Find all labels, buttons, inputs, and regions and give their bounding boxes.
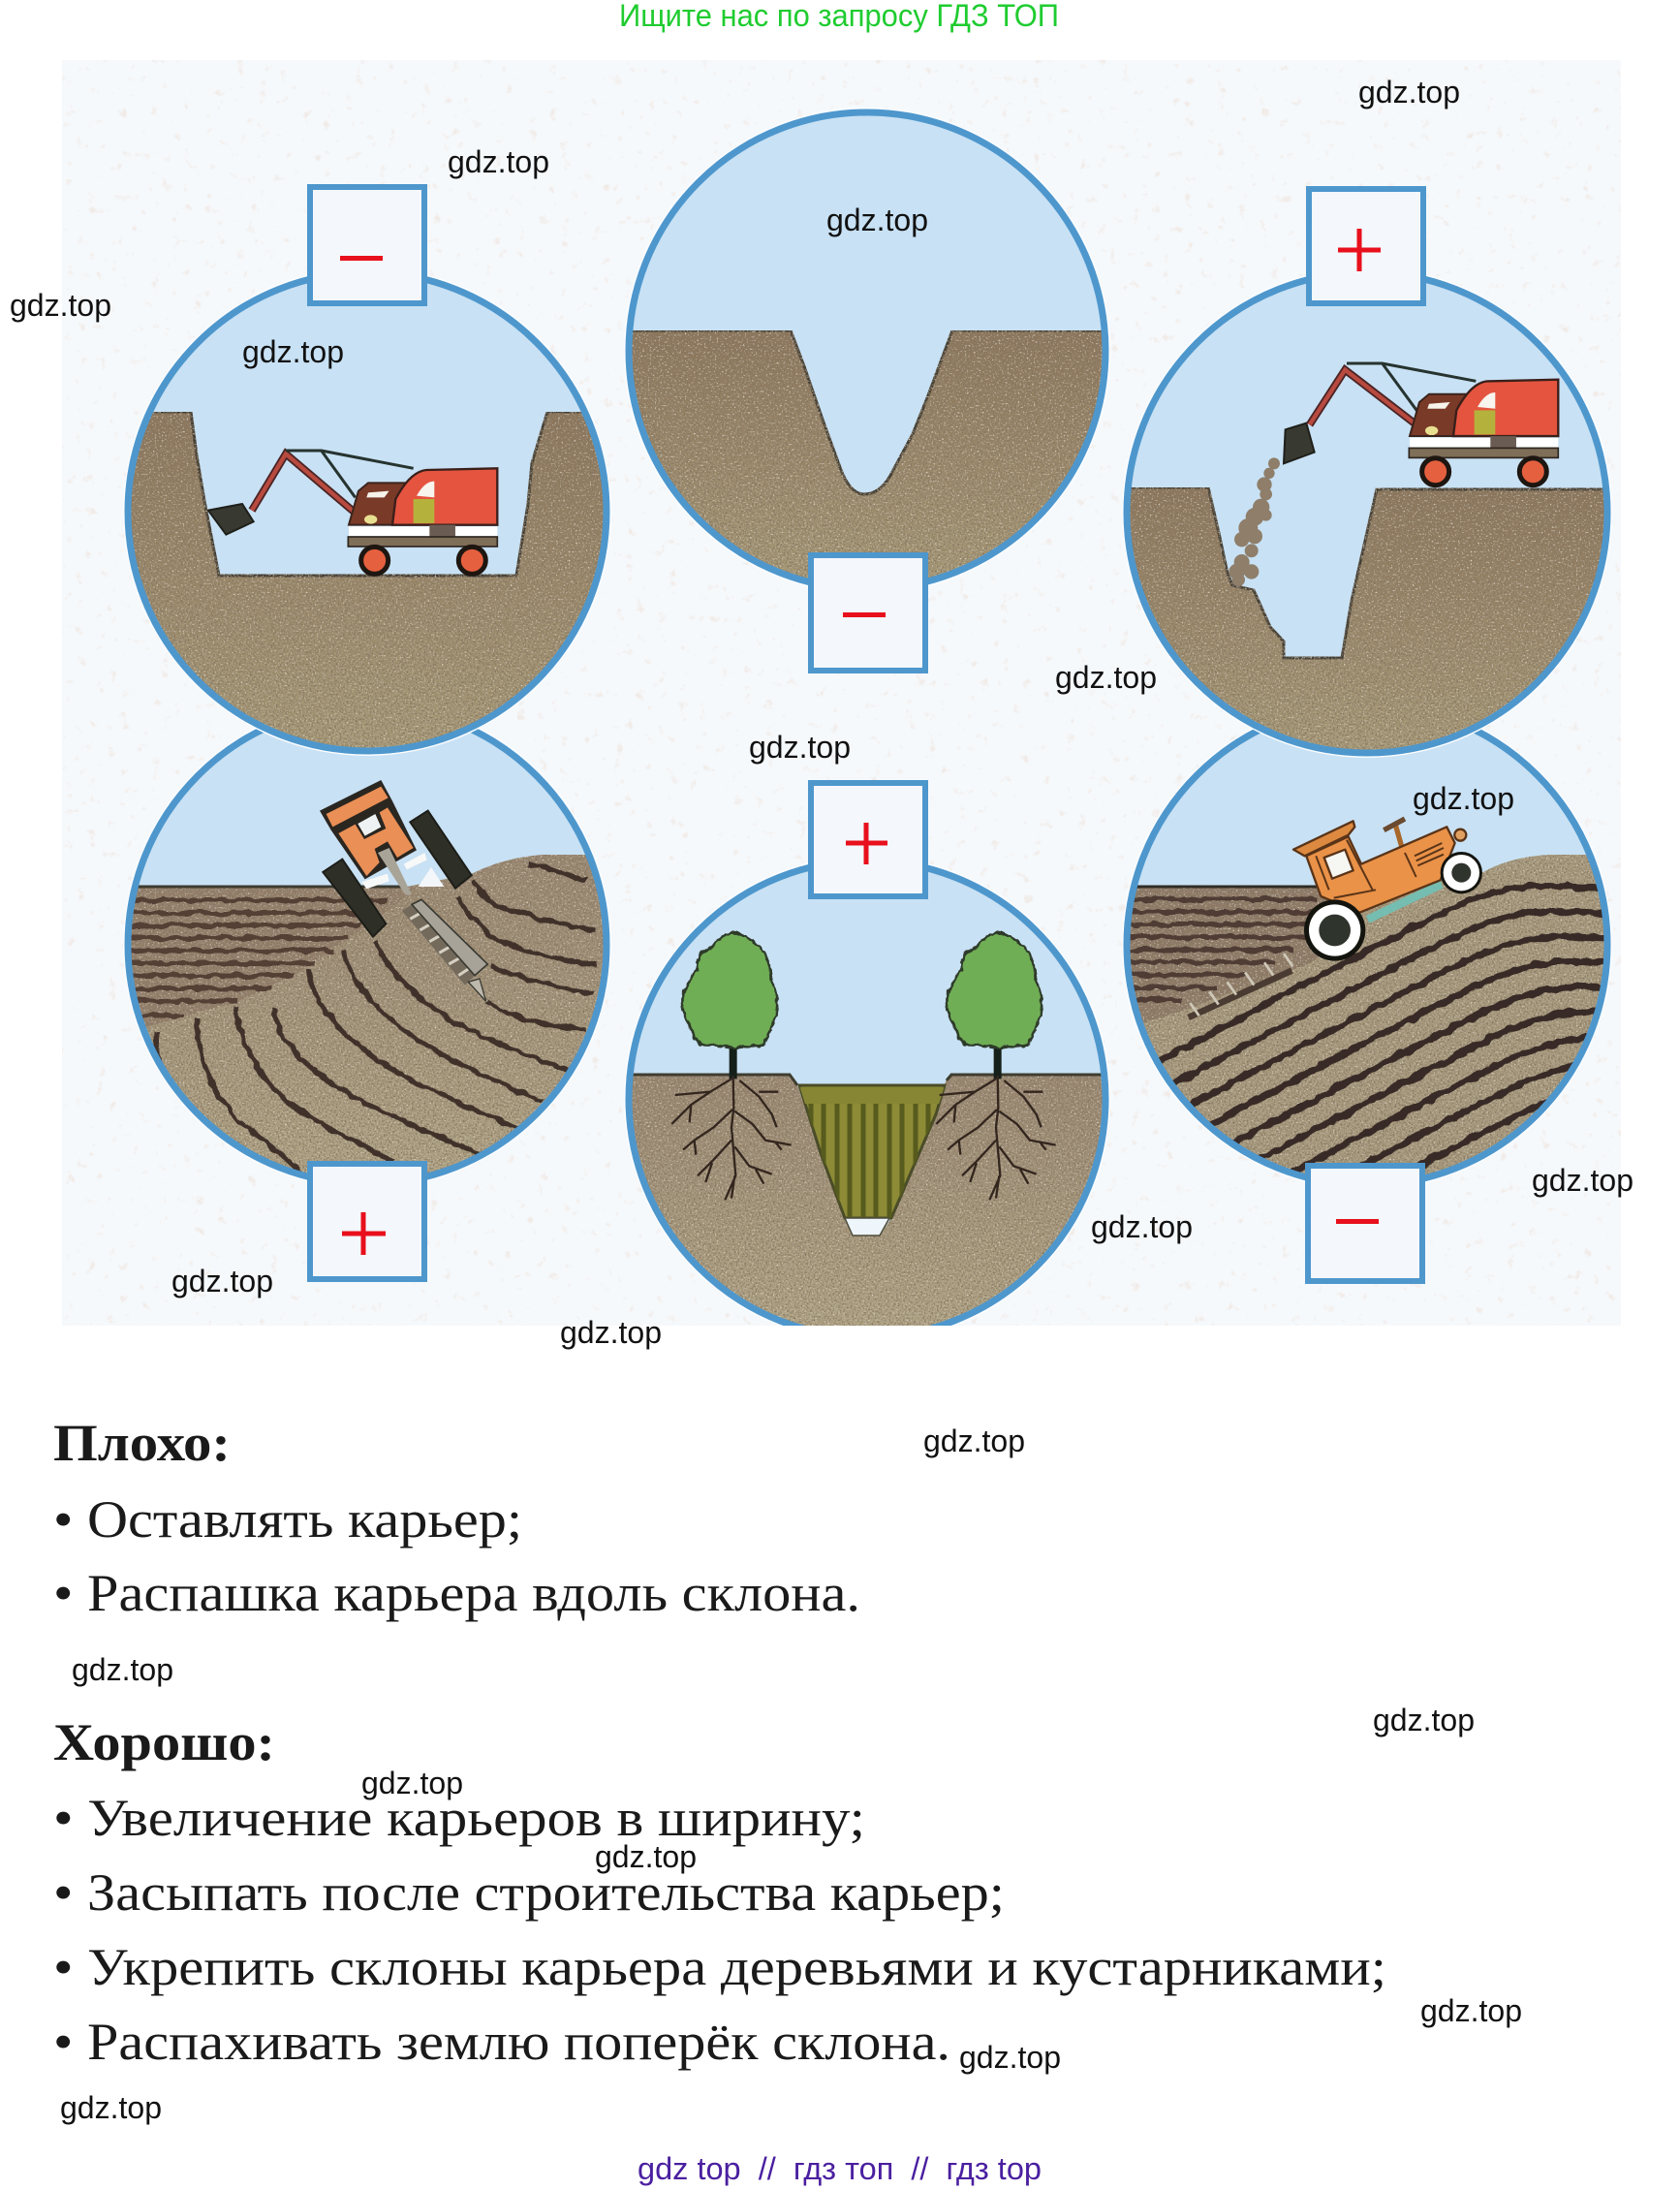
watermark labels: gdz.top [1358,75,1460,110]
watermark labels: gdz.top [171,1264,273,1298]
heading: bad: Плохо: [53,1414,231,1472]
watermark labels: gdz.top [826,203,928,237]
watermark labels: gdz.top [1413,781,1514,816]
icon: excavator [208,451,497,574]
watermark labels: gdz.top [1091,1209,1193,1244]
watermark labels: gdz.top [560,1315,662,1350]
watermark labels: gdz.top [923,1424,1025,1458]
watermark labels: gdz.top [959,2040,1061,2075]
box: minus, top centre [811,555,925,671]
watermark labels: gdz.top [448,144,549,179]
panel: circle top left, wide quarry with excavator [124,275,610,756]
heading: good: Хорошо: [53,1713,275,1771]
watermark labels: gdz.top [749,730,851,765]
text: good item 1: • Увеличение карьеров в ширину; [53,1789,865,1847]
watermark labels: gdz.top [60,2090,162,2125]
icon: plough [1189,954,1292,1017]
watermark labels: gdz.top [242,334,344,369]
panel: circle bottom right, ploughing across slope [1122,729,1611,1182]
text: good item 3: • Укрепить склоны карьера деревьями и кустарниками; [53,1938,1386,1996]
panel: scanned textbook illustration background [62,60,1621,1326]
watermark labels: gdz.top [1532,1163,1633,1198]
watermark labels: gdz.top [1373,1703,1475,1737]
watermark labels: gdz.top [1420,1993,1522,2028]
text: good item 2: • Засыпать после строительства карьер; [53,1863,1005,1922]
text: good item 4: • Распахивать землю поперёк склона. [53,2013,950,2071]
watermark labels: gdz.top [10,288,111,323]
panel: circle top centre, V-shaped ravine [626,109,1110,585]
icon: tractor seen from behind [320,780,487,1001]
text: bad item 1: • Оставлять карьер; [53,1490,522,1549]
box: minus, bottom right [1308,1166,1422,1281]
panel: circle bottom left, ploughing along slope [123,729,610,1180]
panel: circle bottom centre, reinforced ravine with trees [626,864,1110,1326]
icon: left tree with roots [671,933,792,1200]
footer link text: gdz top // гдз топ // гдз top [638,2151,1042,2186]
watermark labels: gdz.top [1055,660,1157,695]
watermark labels: gdz.top [72,1652,173,1687]
text: bad item 2: • Распашка карьера вдоль склона. [53,1564,860,1622]
falling soil [1229,457,1280,586]
watermark labels: gdz.top [595,1839,697,1874]
icon: excavator dumping soil [1284,363,1558,485]
watermark labels: gdz.top [361,1766,463,1800]
box: plus, bottom left [310,1164,424,1279]
icon: right tree with roots [936,933,1056,1200]
box: plus, top right [1309,189,1423,303]
box: plus, bottom centre [811,783,925,896]
panel: circle top right, excavator filling quarry [1124,276,1612,758]
ravine fill with vegetation [790,1085,954,1236]
box: minus, top left [310,187,424,303]
icon: tractor side view [1293,819,1482,961]
